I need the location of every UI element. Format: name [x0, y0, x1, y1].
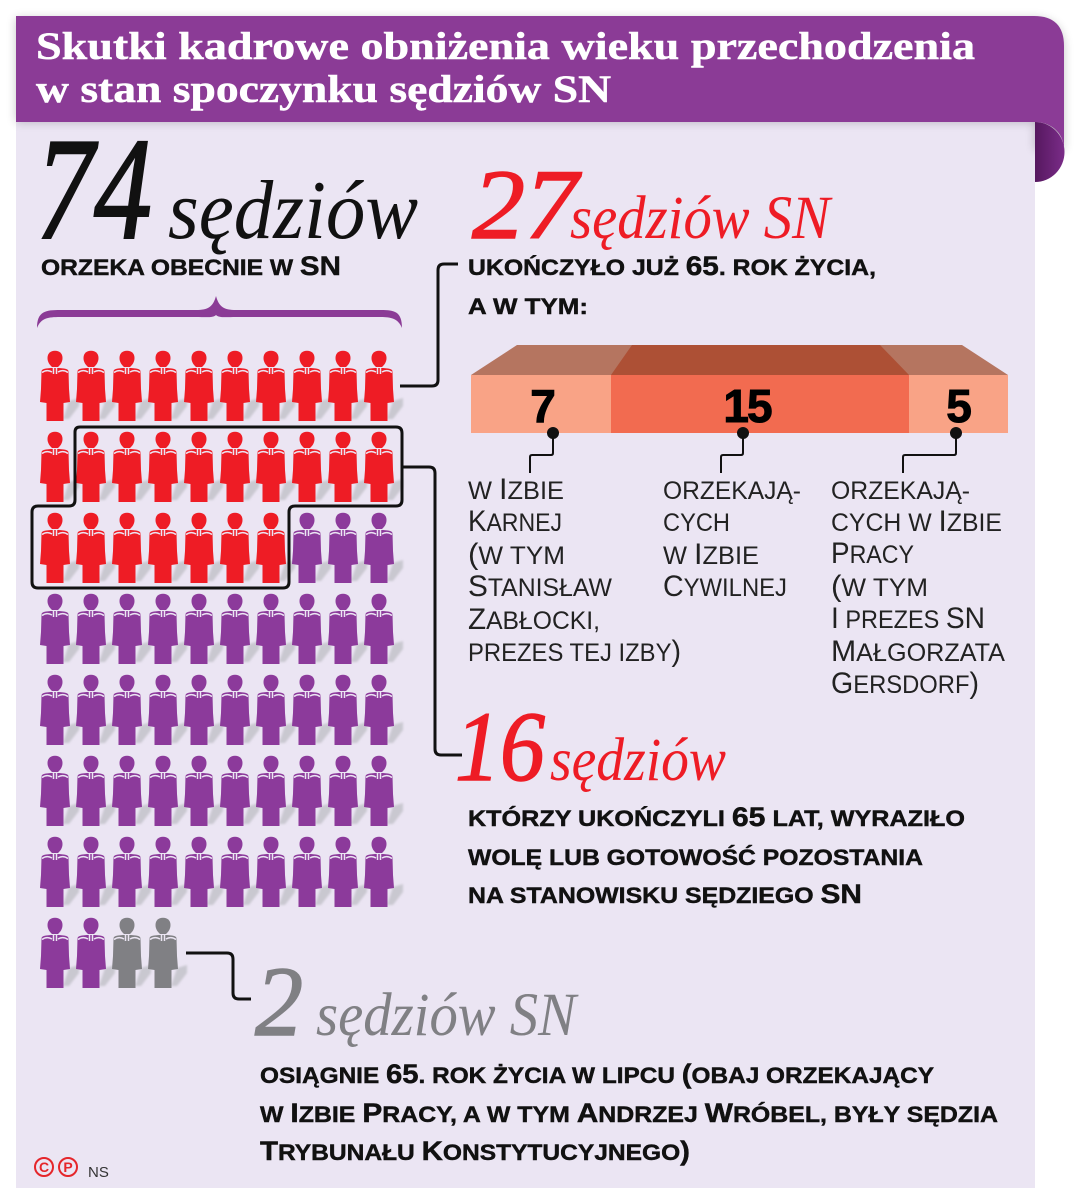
- text: 2 judges description: TRYBUNAŁU KONSTYTUCYJNEGO ): [260, 1136, 690, 1166]
- heading: 74 sędziów: [36, 108, 418, 270]
- text: labour chamber: PRACY: [831, 537, 914, 570]
- text: 16 judges description: KTÓRZY UKOŃCZYLI 65 LAT, WYRAZIŁO: [468, 802, 965, 832]
- text: 16 judges description: WOLĘ LUB GOTOWOŚĆ POZOSTANIA: [468, 845, 923, 870]
- text: criminal chamber: [468, 473, 681, 668]
- text: labour chamber: MAŁGORZATA: [831, 635, 1005, 668]
- text: criminal chamber: KARNEJ: [468, 505, 562, 538]
- connector: 16 judges: [403, 467, 462, 755]
- heading: 2 judges: 2: [255, 946, 303, 1057]
- heading: 2 judges: sędziów SN: [316, 982, 579, 1049]
- text: criminal chamber: STANISŁAW: [468, 570, 612, 603]
- 3D bar chart: 7, 15, 5: 5: [946, 380, 972, 432]
- text: civil chamber: ORZEKAJĄ-: [663, 477, 801, 505]
- icon: copyright and credit: C: [39, 1159, 49, 1175]
- text: civil chamber: W IZBIE: [663, 538, 759, 571]
- text: criminal chamber: W IZBIE: [468, 473, 564, 506]
- leader lines: [530, 428, 961, 473]
- heading: 16 judges: 16: [455, 691, 545, 802]
- outline around 16 judges: [32, 427, 402, 588]
- heading: 27 judges: 27: [472, 149, 582, 260]
- text: labour chamber: GERSDORF): [831, 667, 979, 700]
- connector: 27 judges: [400, 264, 458, 386]
- text: criminal chamber: ZABŁOCKI,: [468, 603, 600, 636]
- icon: copyright and credit: [35, 1158, 109, 1181]
- grey judges: [112, 918, 187, 988]
- title: Skutki kadrowe obniżenia wieku przechodzenia: [36, 25, 975, 68]
- icon: copyright and credit: P: [63, 1159, 73, 1175]
- brace: [37, 296, 402, 328]
- text: criminal chamber: PREZES TEJ IZBY): [468, 635, 681, 668]
- heading: 27 judges: sędziów SN: [570, 185, 833, 252]
- text: 2 judges description: W IZBIE PRACY, A W TYM ANDRZEJ WRÓBEL, BYŁY SĘDZIA: [260, 1098, 998, 1128]
- 3D bar chart: 7, 15, 5: [471, 345, 1008, 433]
- title: w stan spoczynku sędziów SN: [36, 68, 611, 111]
- red judges: [40, 351, 403, 583]
- text: civil chamber: CYWILNEJ: [663, 570, 787, 603]
- text: labour chamber: I PREZES SN: [831, 602, 985, 635]
- text: 27 judges description: [468, 251, 876, 319]
- text: labour chamber: (W TYM: [831, 570, 928, 603]
- text: 27 judges description: UKOŃCZYŁO JUŻ 65. ROK ŻYCIA,: [468, 251, 876, 281]
- heading: 74 sędziów: sędziów: [168, 164, 418, 257]
- text: 16 judges description: NA STANOWISKU SĘDZIEGO SN: [468, 879, 862, 909]
- heading: 27 judges: [472, 149, 833, 260]
- text: labour chamber: CYCH W IZBIE: [831, 505, 1002, 538]
- 3D bar chart: 7, 15, 5: 7: [530, 380, 556, 432]
- heading: 16 judges: sędziów: [550, 727, 726, 794]
- text: civil chamber: CYCH: [663, 509, 730, 537]
- text: labour chamber: ORZEKAJĄ-: [831, 477, 970, 505]
- text: labour chamber: [831, 477, 1005, 700]
- 3D bar chart: 7, 15, 5: 15: [723, 380, 772, 432]
- heading: 2 judges: [255, 946, 579, 1057]
- text: 2 judges description: OSIĄGNIE 65. ROK ŻYCIA W LIPCU (OBAJ ORZEKAJĄCY: [260, 1059, 934, 1089]
- heading: 16 judges: [455, 691, 726, 802]
- text: 27 judges description: A W TYM:: [468, 294, 588, 319]
- header ribbon: [16, 16, 1064, 182]
- connector: 2 judges: [186, 953, 251, 999]
- text: criminal chamber: (W TYM: [468, 538, 565, 571]
- text: 16 judges description: [468, 802, 965, 909]
- purple judges: [40, 513, 403, 988]
- pictogram of 74 judges: [40, 351, 403, 988]
- heading: 74 sędziów: 74: [36, 108, 152, 270]
- text: civil chamber: [663, 477, 801, 603]
- subheading: ORZEKA OBECNIE W SN: [41, 251, 341, 281]
- text: 2 judges description: [260, 1059, 998, 1166]
- icon: copyright and credit: NS: [88, 1164, 109, 1181]
